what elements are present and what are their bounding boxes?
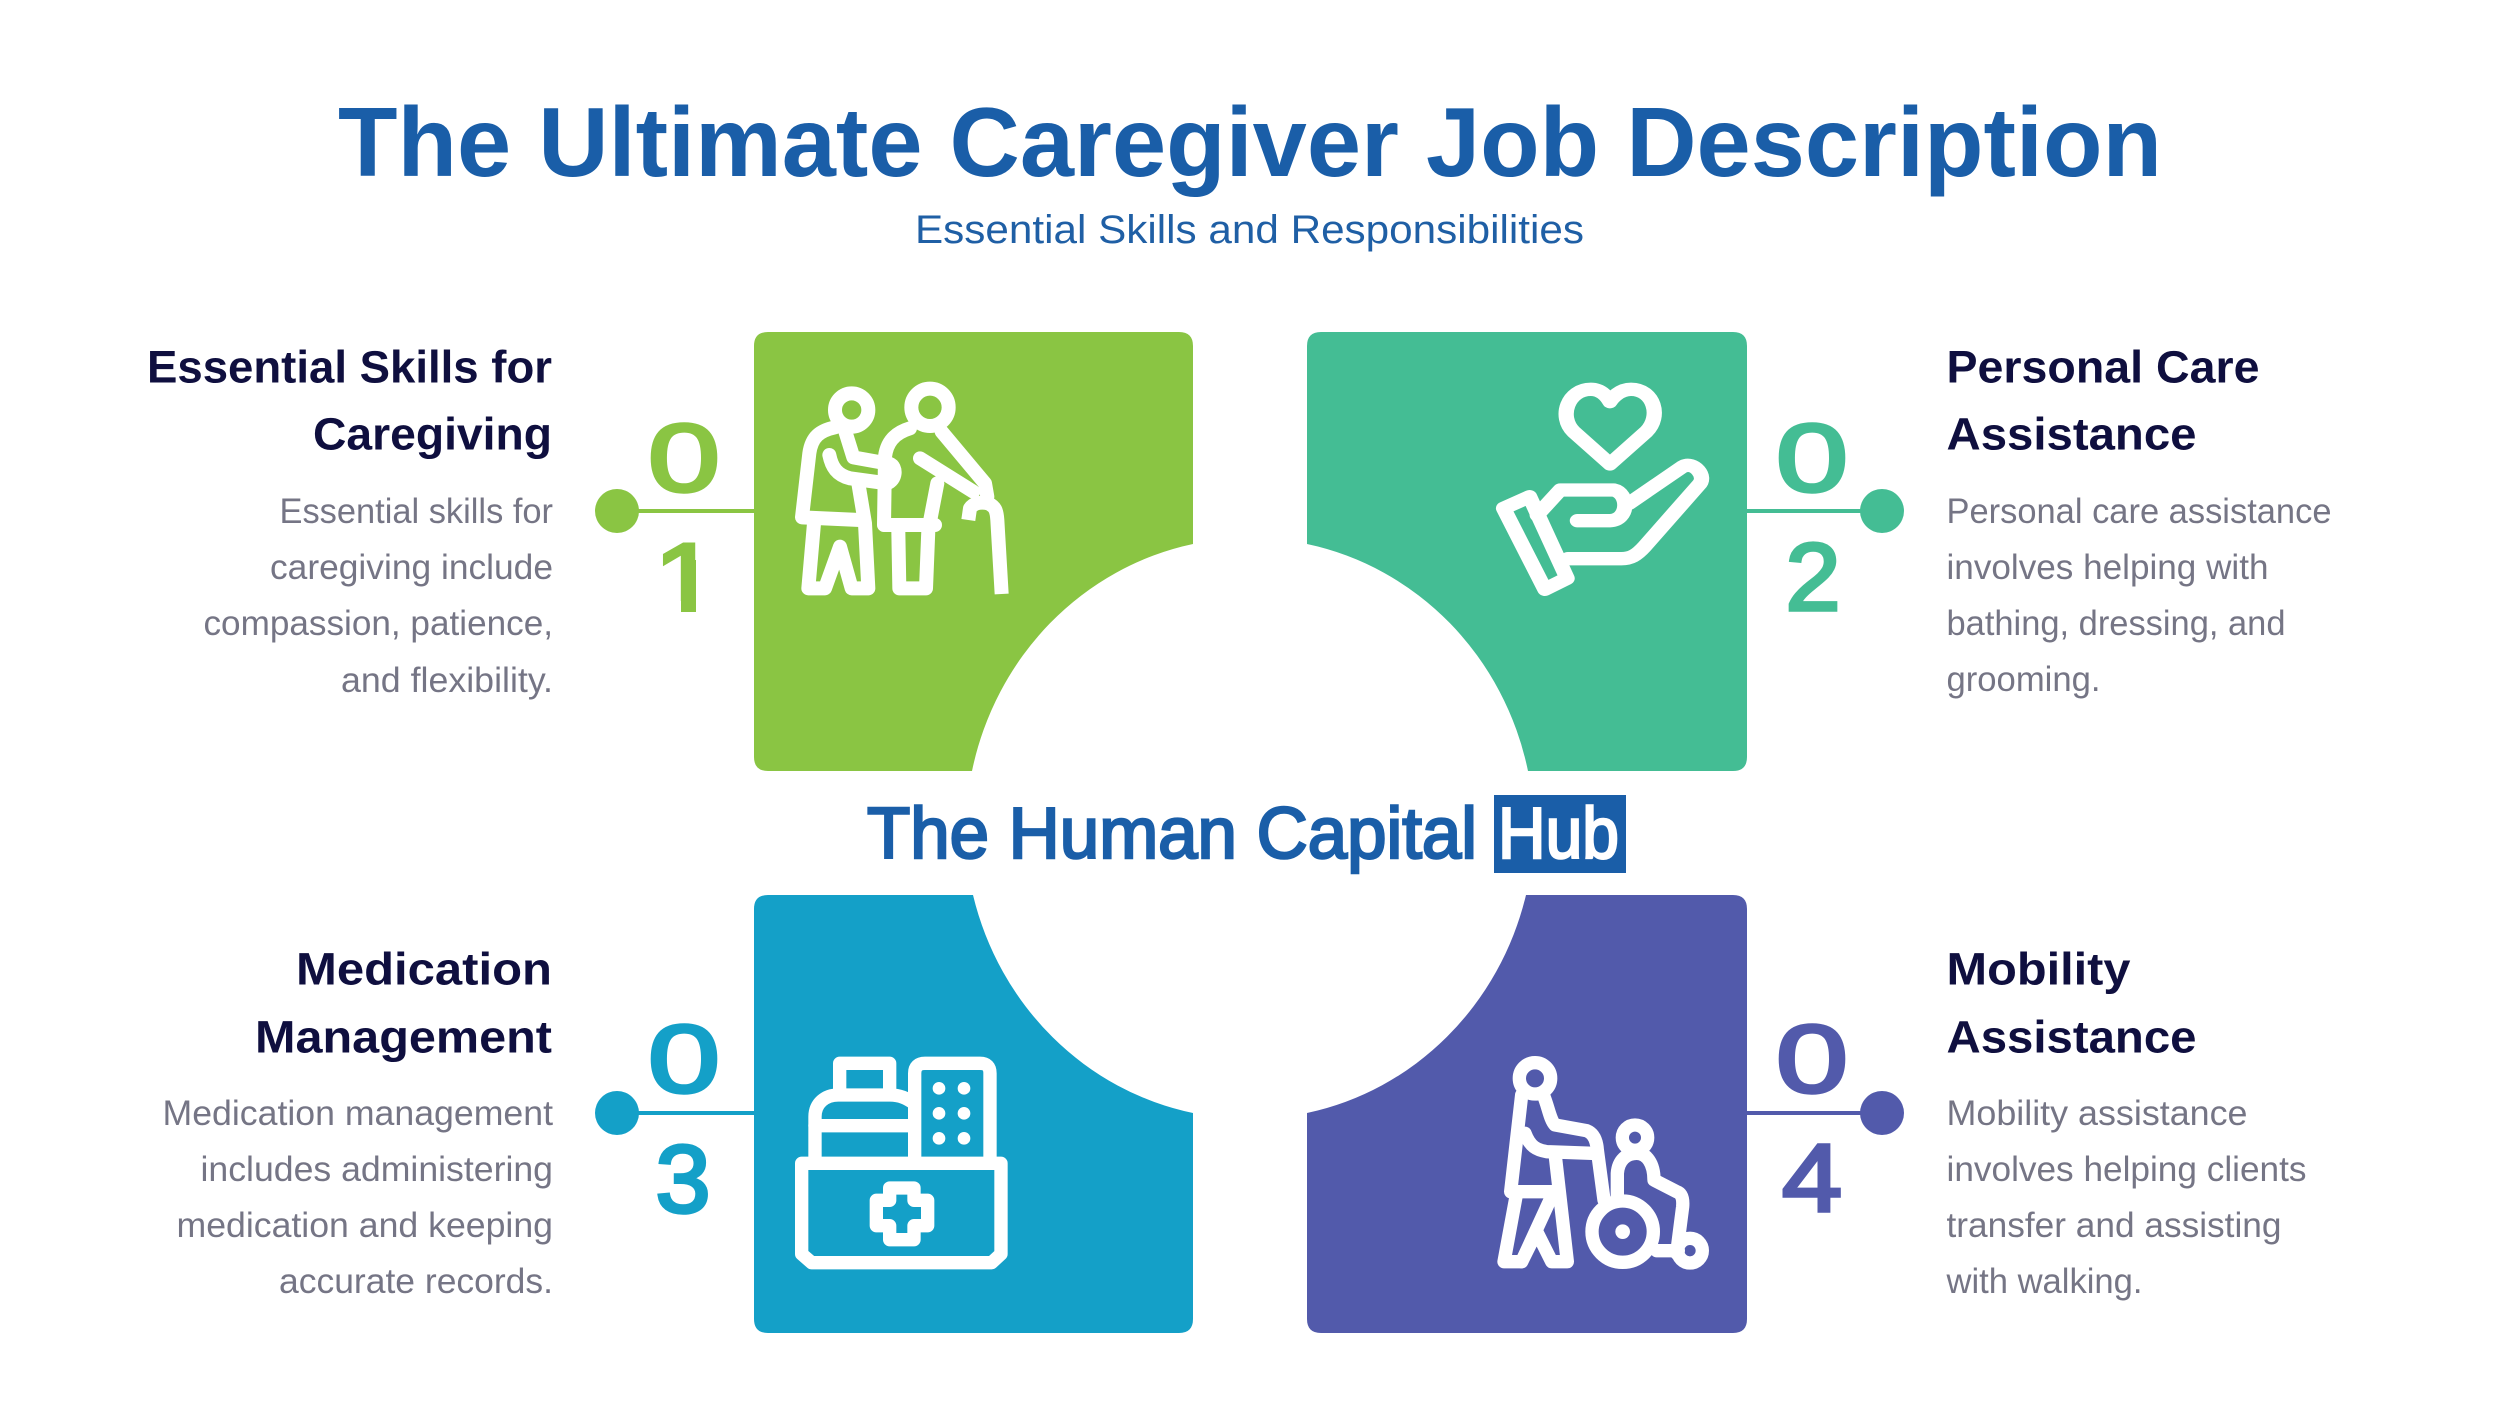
- connector dot: [1860, 1091, 1904, 1135]
- icon: medical kit with bottle and pills: [802, 1063, 1001, 1263]
- number 02: 0: [1776, 405, 1848, 512]
- body text: Essential skills for: [280, 492, 553, 531]
- heading: [255, 944, 552, 1062]
- body text: accurate records.: [279, 1262, 553, 1301]
- number 04: 0: [1776, 1006, 1848, 1113]
- title: The Ultimate Caregiver Job Description: [338, 87, 2162, 197]
- heading: [147, 342, 552, 460]
- card: blue quadrant: [754, 895, 1193, 1333]
- number 04: [1776, 1006, 1848, 1232]
- heading: Assistance: [1946, 408, 2196, 460]
- heading: [1946, 944, 2196, 1062]
- connector dot: [1860, 489, 1904, 533]
- body text: involves helping with: [1946, 548, 2268, 587]
- body text: transfer and assisting: [1946, 1206, 2282, 1245]
- connector dot: [595, 1091, 639, 1135]
- panel: personal care assistance: [1307, 332, 2332, 771]
- heading: Caregiving: [313, 408, 552, 460]
- logo: The Human Capital Hub: Hub: [1498, 794, 1619, 874]
- body text: with walking.: [1946, 1262, 2142, 1301]
- connector line: [617, 509, 754, 513]
- number 01: [648, 405, 725, 631]
- body text: involves helping clients: [1946, 1150, 2306, 1189]
- body text: [1946, 492, 2332, 699]
- body text: bathing, dressing, and: [1946, 604, 2286, 643]
- subtitle: Essential Skills and Responsibilities: [915, 208, 1584, 252]
- body text: grooming.: [1946, 660, 2100, 699]
- body text: [162, 1094, 553, 1301]
- heading: Management: [255, 1012, 552, 1062]
- panel: essential skills for caregiving: [147, 332, 1193, 771]
- heading: Personal Care: [1946, 342, 2260, 392]
- panel: mobility assistance: [1307, 895, 2306, 1333]
- body text: [204, 492, 553, 700]
- heading: Medication: [296, 944, 552, 994]
- heading: Mobility: [1946, 944, 2130, 994]
- icon: heart over open hand: [1504, 389, 1702, 589]
- card: green quadrant: [754, 332, 1193, 771]
- body text: caregiving include: [270, 548, 553, 587]
- connector line: [1747, 1111, 1881, 1115]
- logo: The Human Capital Hub: The Human Capital: [867, 794, 1477, 874]
- body text: [1946, 1094, 2306, 1301]
- body text: Personal care assistance: [1946, 492, 2332, 531]
- body text: and flexibility.: [341, 661, 553, 700]
- body text: Mobility assistance: [1946, 1094, 2248, 1133]
- icon: caregiver supporting elderly person: [802, 389, 1002, 594]
- connector dot: [595, 489, 639, 533]
- number 02: 2: [1786, 524, 1840, 631]
- card: indigo quadrant: [1307, 895, 1747, 1333]
- connector line: [1747, 509, 1881, 513]
- card: teal quadrant: [1307, 332, 1747, 771]
- number 03: 3: [656, 1126, 710, 1233]
- body text: compassion, patience,: [204, 604, 553, 643]
- number 02: [1776, 405, 1848, 631]
- number 03: [648, 1006, 720, 1233]
- body text: Medication management: [162, 1094, 553, 1133]
- panel: medication management: [162, 895, 1193, 1333]
- number 04: 4: [1782, 1125, 1842, 1232]
- body text: medication and keeping: [176, 1206, 553, 1245]
- number 01: 1: [654, 524, 718, 631]
- body text: includes administering: [200, 1150, 553, 1189]
- icon: person pushing wheelchair: [1504, 1063, 1702, 1263]
- heading: Assistance: [1946, 1012, 2196, 1062]
- heading: [1946, 342, 2260, 460]
- number 01: 0: [648, 405, 720, 512]
- connector line: [617, 1111, 754, 1115]
- number 03: 0: [648, 1006, 720, 1113]
- heading: Essential Skills for: [147, 342, 552, 392]
